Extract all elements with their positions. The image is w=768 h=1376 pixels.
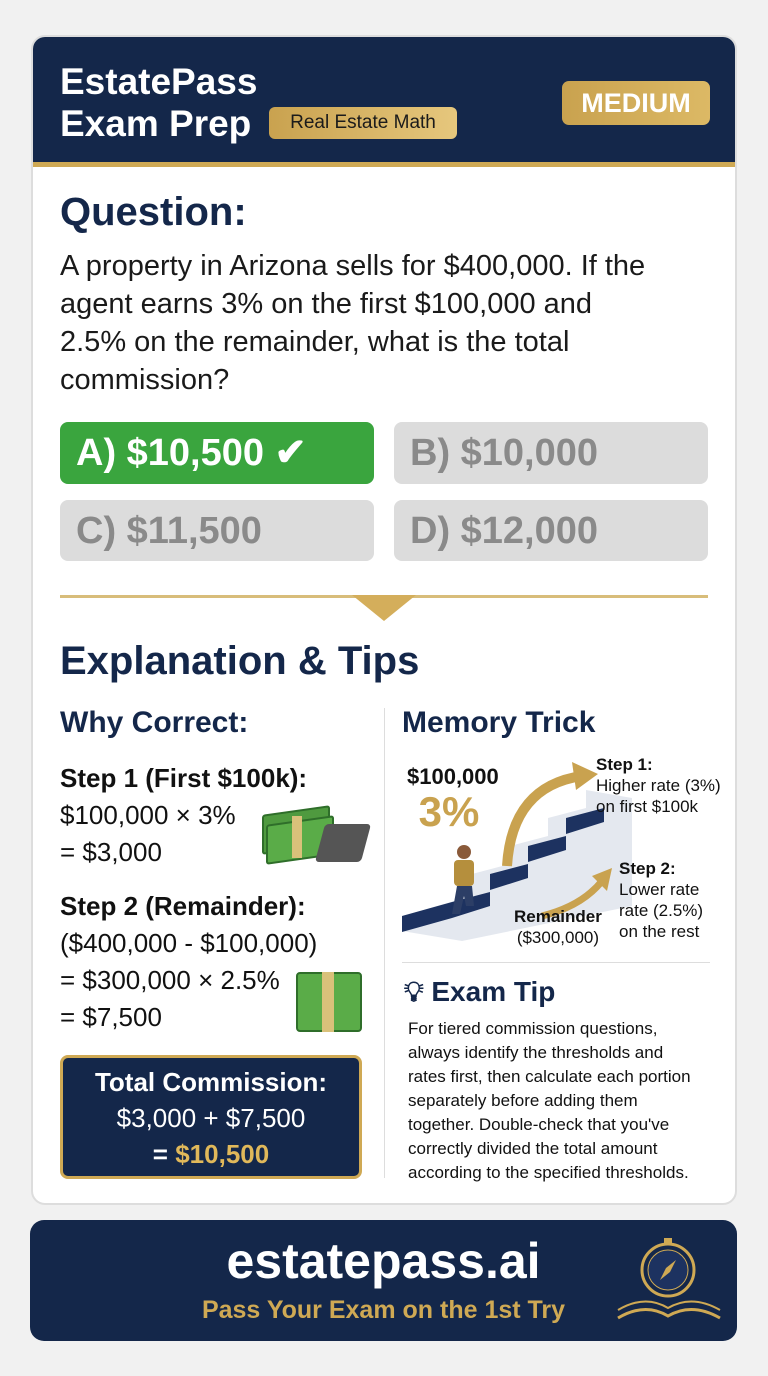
divider right [402, 962, 710, 963]
tip text: separately before adding them [408, 1091, 638, 1110]
option A correct: A) $10,500 ✔ [76, 432, 306, 474]
tip text: together. Double-check that you've [408, 1115, 669, 1134]
tip text: correctly divided the total amount [408, 1139, 657, 1158]
question text: agent earns 3% on the first $100,000 and [60, 288, 592, 320]
question text [60, 250, 645, 396]
tag: Real Estate Math [269, 107, 457, 139]
step 2 label: Step 2: [619, 859, 676, 878]
icon: money and calculator [262, 806, 370, 864]
tip text: rates first, then calculate each portion [408, 1067, 691, 1086]
step 2 label: on the rest [619, 922, 699, 941]
heading: Memory Trick [402, 706, 595, 739]
step 2 label: rate (2.5%) [619, 901, 703, 920]
icon: compass on book [617, 1238, 721, 1320]
divider with triangle [60, 595, 708, 621]
option B [394, 422, 708, 484]
step 1 label: Higher rate (3%) [596, 776, 721, 795]
step 2 [60, 891, 317, 1032]
footer url: estatepass.ai [226, 1233, 541, 1289]
step 1: $100,000 × 3% [60, 800, 236, 830]
step 2: Step 2 (Remainder): [60, 891, 306, 921]
question text: commission? [60, 364, 229, 396]
vertical divider [384, 708, 385, 1178]
remainder label [514, 907, 602, 947]
tagline: Pass Your Exam on the 1st Try [202, 1296, 565, 1324]
option D [394, 500, 708, 561]
title: EstatePass [60, 61, 257, 102]
option C: C) $11,500 [76, 510, 262, 552]
option C [60, 500, 374, 561]
label $100,000 3%: $100,000 [407, 764, 499, 789]
remainder label: Remainder [514, 907, 602, 926]
tag: Real Estate Math: Real Estate Math [290, 112, 436, 133]
label $100,000 3%: 3% [419, 788, 479, 835]
badge: MEDIUM [562, 81, 710, 125]
subheading: Why Correct: [60, 706, 248, 739]
step 1 label: Step 1: [596, 755, 653, 774]
tip text: according to the specified thresholds. [408, 1163, 689, 1182]
footer [30, 1220, 737, 1341]
total commission box: = $10,500 [153, 1139, 269, 1169]
step 1: Step 1 (First $100k): [60, 763, 307, 793]
question heading: Question: [60, 190, 247, 234]
header [33, 37, 739, 167]
step 2 label: Lower rate [619, 880, 699, 899]
step 1 [60, 763, 307, 867]
main card [31, 35, 737, 1205]
icon: money stack [296, 972, 362, 1032]
exam tip [404, 976, 691, 1182]
tip text [408, 1019, 691, 1182]
step 2 label [619, 859, 703, 941]
total commission box: Total Commission: [95, 1067, 327, 1097]
explanation heading: Explanation & Tips [60, 639, 419, 683]
staircase illustration [402, 762, 632, 941]
total commission box [60, 1055, 362, 1179]
title [60, 61, 257, 144]
step 1 label: on first $100k [596, 797, 698, 816]
step 1: = $3,000 [60, 837, 162, 867]
step 2: ($400,000 - $100,000) [60, 928, 317, 958]
right column: memory trick [402, 706, 721, 947]
total commission box: $3,000 + $7,500 [117, 1103, 305, 1133]
step 2: = $300,000 × 2.5% [60, 965, 280, 995]
title: Exam Prep [60, 103, 251, 144]
option B: B) $10,000 [410, 432, 598, 474]
tip text: always identify the thresholds and [408, 1043, 663, 1062]
step 2: = $7,500 [60, 1002, 162, 1032]
option D: D) $12,000 [410, 510, 598, 552]
heading with bulb: 💡︎ Exam Tip [404, 976, 555, 1007]
question text: A property in Arizona sells for $400,000. If the [60, 250, 645, 282]
question text: 2.5% on the remainder, what is the total [60, 326, 569, 358]
left column: why correct [60, 706, 370, 1179]
label $100,000 3% [407, 764, 499, 835]
badge: MEDIUM: MEDIUM [581, 88, 691, 118]
tip text: For tiered commission questions, [408, 1019, 657, 1038]
option A correct [60, 422, 374, 484]
step 1 label [596, 755, 721, 816]
remainder label: ($300,000) [517, 928, 599, 947]
